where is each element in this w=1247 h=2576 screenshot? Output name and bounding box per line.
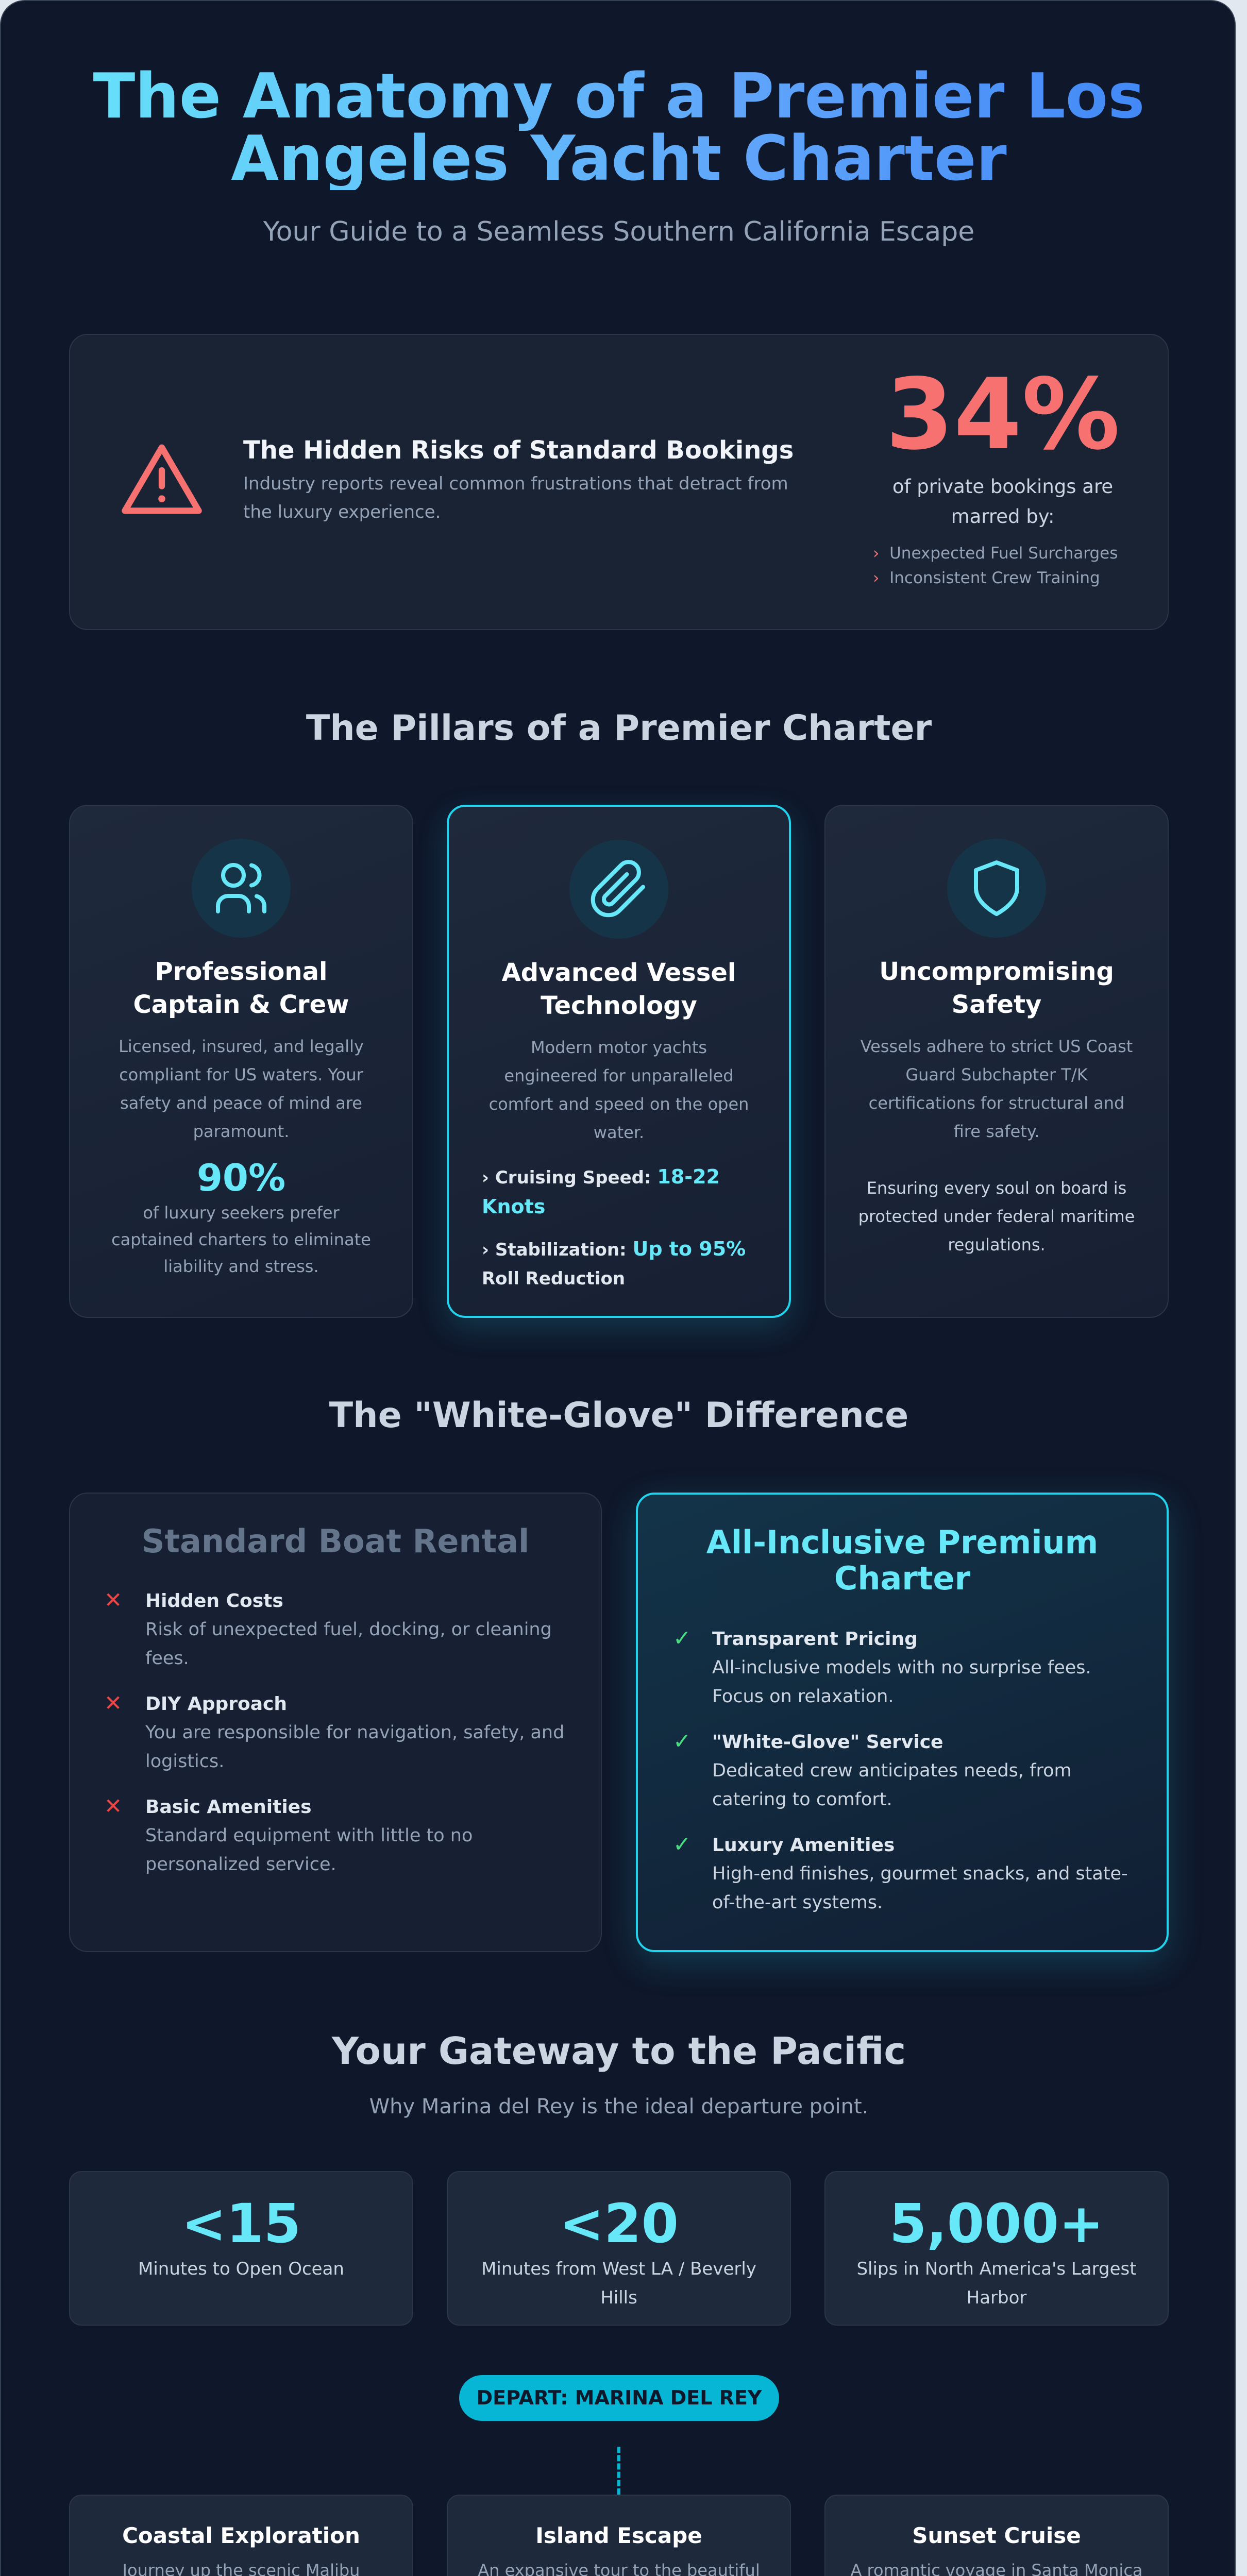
- stat: 34%: [886, 358, 1120, 528]
- item: service: "White-Glove" Service: [712, 1732, 943, 1753]
- item: hidden costs: Risk of unexpected fuel, docking, or cleaning fees.: [145, 1619, 552, 1669]
- item: service: [673, 1728, 1072, 1810]
- risk body: Industry reports reveal common frustrations that detract from the luxury experience.: [243, 473, 788, 522]
- item: hidden costs: [104, 1587, 552, 1669]
- depart pill: [459, 2375, 779, 2421]
- item: pricing: All-inclusive models with no surprise fees. Focus on relaxation.: [712, 1657, 1091, 1707]
- pillar title: Safety: [952, 990, 1041, 1019]
- panel: standard rental: ✕: [104, 1587, 122, 1613]
- pillar title: [502, 958, 736, 1020]
- item: basic amenities: Basic Amenities: [145, 1797, 312, 1818]
- pillar title: Professional: [155, 957, 327, 986]
- heading: gateway: Your Gateway to the Pacific: [332, 2029, 906, 2073]
- item: luxury amenities: Luxury Amenities: [712, 1835, 895, 1856]
- pillar title: [879, 957, 1114, 1019]
- stat: <20: Minutes from West LA / Beverly Hills: [481, 2259, 756, 2308]
- stat: <20: <20: [559, 2192, 679, 2255]
- pillar title: Uncompromising: [879, 957, 1114, 986]
- heading: white-glove: The "White-Glove" Difference: [329, 1395, 908, 1436]
- spec bullets: › Stabilization: Up to 95% Roll Reduction: [482, 1238, 746, 1289]
- item: luxury amenities: High-end finishes, gourmet snacks, and state-of-the-art systems.: [712, 1863, 1128, 1913]
- panel: standard rental: ✕: [104, 1793, 122, 1819]
- spec bullets: [482, 1165, 746, 1289]
- stat: <20: [447, 2171, 791, 2326]
- pillar title: [133, 957, 349, 1019]
- destination: sunset: [824, 2495, 1169, 2576]
- icon: users: [192, 839, 291, 938]
- pillar title: Captain & Crew: [133, 990, 349, 1019]
- pillar: safety: [824, 805, 1169, 1318]
- item: luxury amenities: [673, 1832, 1128, 1913]
- stat: <15: [69, 2171, 413, 2326]
- stat: 5,000+: Slips in North America's Largest Harbor: [856, 2259, 1137, 2308]
- risk bullets: › Unexpected Fuel Surcharges: [873, 544, 1118, 563]
- pillar: vessel technology: [447, 805, 791, 1318]
- destination: coastal: Coastal Exploration: [122, 2523, 360, 2548]
- title: The Anatomy of a Premier Los: [93, 61, 1145, 132]
- pillar title: Advanced Vessel: [502, 958, 736, 987]
- pillar body: Modern motor yachts engineered for unparalleled comfort and speed on the open water.: [489, 1038, 749, 1142]
- icon: warning triangle: [122, 444, 202, 514]
- panel: hidden risks: [69, 334, 1169, 630]
- destination: sunset: Sunset Cruise: [912, 2523, 1081, 2548]
- pillar title: Technology: [541, 991, 697, 1020]
- pillar body: Licensed, insured, and legally compliant for US waters. Your safety and peace of mind are paramount.: [119, 1037, 364, 1141]
- stat: <15: <15: [181, 2192, 301, 2255]
- item: DIY: DIY Approach: [145, 1693, 287, 1715]
- title: Angeles Yacht Charter: [231, 123, 1007, 195]
- title: [1, 65, 1237, 190]
- panel: premium charter: [636, 1493, 1169, 1952]
- risk bullets: [873, 544, 1118, 587]
- panel title: Charter: [834, 1560, 970, 1597]
- subtitle: Your Guide to a Seamless Southern California Escape: [263, 216, 974, 247]
- heading: pillars: The Pillars of a Premier Charter: [306, 708, 932, 749]
- item: pricing: [673, 1625, 1091, 1707]
- panel title: [706, 1523, 1098, 1597]
- destination: island: Island Escape: [535, 2523, 702, 2548]
- panel: premium charter: ✓: [673, 1832, 691, 1857]
- panel: standard rental: ✕: [104, 1690, 122, 1716]
- stat: 34%: marred by:: [951, 505, 1054, 528]
- icon: shield: [947, 839, 1046, 938]
- stat: 34%: of private bookings are: [892, 476, 1113, 498]
- item: DIY: [104, 1690, 564, 1772]
- destination: island: [447, 2495, 791, 2576]
- risk heading: The Hidden Risks of Standard Bookings: [243, 436, 794, 465]
- item: pricing: Transparent Pricing: [712, 1629, 918, 1650]
- stat: 34%: 34%: [886, 358, 1120, 471]
- panel: premium charter: ✓: [673, 1728, 691, 1754]
- pillar: captain & crew: [69, 805, 413, 1318]
- item: service: Dedicated crew anticipates needs, from catering to comfort.: [712, 1760, 1072, 1810]
- stat 90%: [111, 1156, 371, 1276]
- item: basic amenities: Standard equipment with little to no personalized service.: [145, 1825, 473, 1875]
- spec bullets: › Cruising Speed: 18-22 Knots: [482, 1165, 720, 1218]
- panel title: Standard Boat Rental: [142, 1522, 529, 1560]
- panel: premium charter: ✓: [673, 1625, 691, 1651]
- panel: standard rental: [69, 1493, 602, 1952]
- item: hidden costs: Hidden Costs: [145, 1590, 283, 1612]
- stat: <15: Minutes to Open Ocean: [138, 2259, 344, 2279]
- panel title: All-Inclusive Premium: [706, 1523, 1098, 1561]
- stat: 5,000+: 5,000+: [889, 2192, 1104, 2255]
- stat 90%: 90%: [197, 1156, 285, 1199]
- pillar body: Vessels adhere to strict US Coast Guard Subchapter T/K certifications for structural and fire safety.: [861, 1037, 1133, 1141]
- icon: paperclip: [569, 840, 668, 939]
- risk bullets: › Inconsistent Crew Training: [873, 569, 1100, 587]
- stat 90%: of luxury seekers prefer captained charters to eliminate liability and stress.: [111, 1203, 371, 1276]
- destination: coastal: [69, 2495, 413, 2576]
- item: basic amenities: [104, 1793, 473, 1875]
- depart pill: DEPART: MARINA DEL REY: [477, 2386, 762, 2409]
- pillar body: Ensuring every soul on board is protected under federal maritime regulations.: [858, 1178, 1135, 1255]
- stat: 5,000+: [824, 2171, 1169, 2326]
- pillar body: [858, 1037, 1135, 1255]
- arrow: dashed connector: [617, 2447, 620, 2495]
- gateway subtitle: Why Marina del Rey is the ideal departure point.: [369, 2095, 868, 2119]
- item: DIY: You are responsible for navigation, safety, and logistics.: [145, 1722, 564, 1772]
